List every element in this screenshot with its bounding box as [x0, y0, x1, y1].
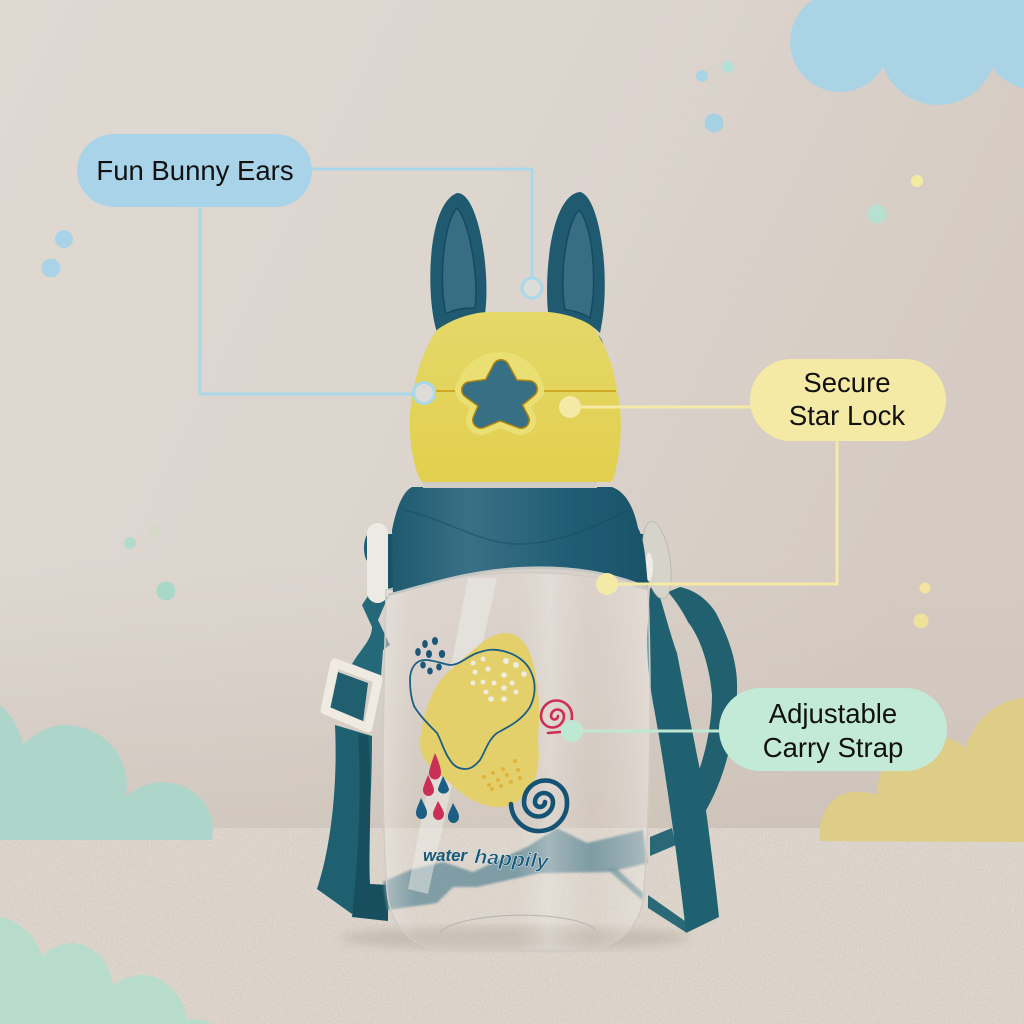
yellow cap [410, 312, 621, 482]
callout pill: Secure Star Lock [750, 359, 946, 441]
star lock [456, 352, 544, 420]
teal ear base behind cap [431, 315, 603, 375]
bottle product [317, 192, 737, 950]
glass base ellipse [440, 915, 596, 932]
print: red spiral [541, 700, 572, 733]
print: brand text: happily [474, 846, 550, 873]
strap: left lower front [317, 725, 372, 914]
strap: front right long [647, 587, 719, 933]
callout marker: star lock [559, 396, 581, 418]
strap: twisted section above left buckle [352, 590, 390, 676]
cloud: right yellow [820, 698, 1024, 842]
strap: back section seen through bottle [383, 828, 647, 910]
print: brand text [423, 846, 550, 873]
collar connector right [638, 534, 650, 584]
print: navy dots cluster [415, 637, 445, 674]
callout marker: strap [561, 720, 583, 742]
print: brand text: water [423, 846, 468, 865]
collar connector left [384, 534, 396, 590]
left ear [430, 193, 486, 332]
print: white dots [470, 656, 527, 702]
callout pill: Secure Star Lock: Secure [803, 367, 891, 398]
print: yellow blob [420, 633, 539, 807]
right ear [547, 192, 605, 333]
print: navy spiral [511, 780, 567, 831]
callout line: Adjustable Carry Strap [572, 730, 722, 732]
cloud: bottom left mint [0, 917, 212, 1024]
print: orange dots [482, 759, 522, 791]
strap: left lower back [352, 734, 388, 921]
callout line: Secure Star Lock [570, 407, 837, 584]
callout line: Fun Bunny Ears [200, 169, 532, 394]
print: drops [416, 753, 459, 823]
callout pill: Secure Star Lock: Star Lock [789, 400, 905, 431]
callout marker: cap point [414, 382, 434, 404]
callout pill: Fun Bunny Ears: Fun Bunny Ears [96, 155, 294, 186]
metal neck [423, 481, 597, 488]
cloud: left teal [0, 705, 213, 840]
callout pill: Adjustable Carry Strap [719, 688, 947, 771]
callout marker: collar [596, 573, 618, 595]
collar [392, 487, 648, 593]
collar ridge [402, 510, 630, 544]
buckle with strap band [325, 663, 378, 728]
straw [408, 578, 497, 894]
callout marker: ear point [522, 278, 542, 298]
collar metal rim [388, 568, 648, 595]
background: textured floor [0, 828, 1024, 1024]
bottle glass body [383, 573, 650, 950]
side ring right [638, 519, 676, 601]
callout pill: Adjustable Carry Strap: Adjustable [769, 698, 897, 729]
floor shadow under bottle [340, 926, 690, 950]
strap: band right outside bottle [650, 828, 676, 856]
cap seam [436, 390, 616, 392]
callout pill: Fun Bunny Ears [77, 134, 312, 207]
cloud: top right blue [790, 0, 1024, 105]
decorative dots [42, 61, 930, 628]
callout pill: Adjustable Carry Strap: Carry Strap [763, 732, 903, 763]
strap: back loop right [668, 587, 737, 812]
print: outline blob [410, 650, 535, 769]
side ring left [364, 523, 388, 603]
strap: lower right tail [648, 895, 687, 933]
